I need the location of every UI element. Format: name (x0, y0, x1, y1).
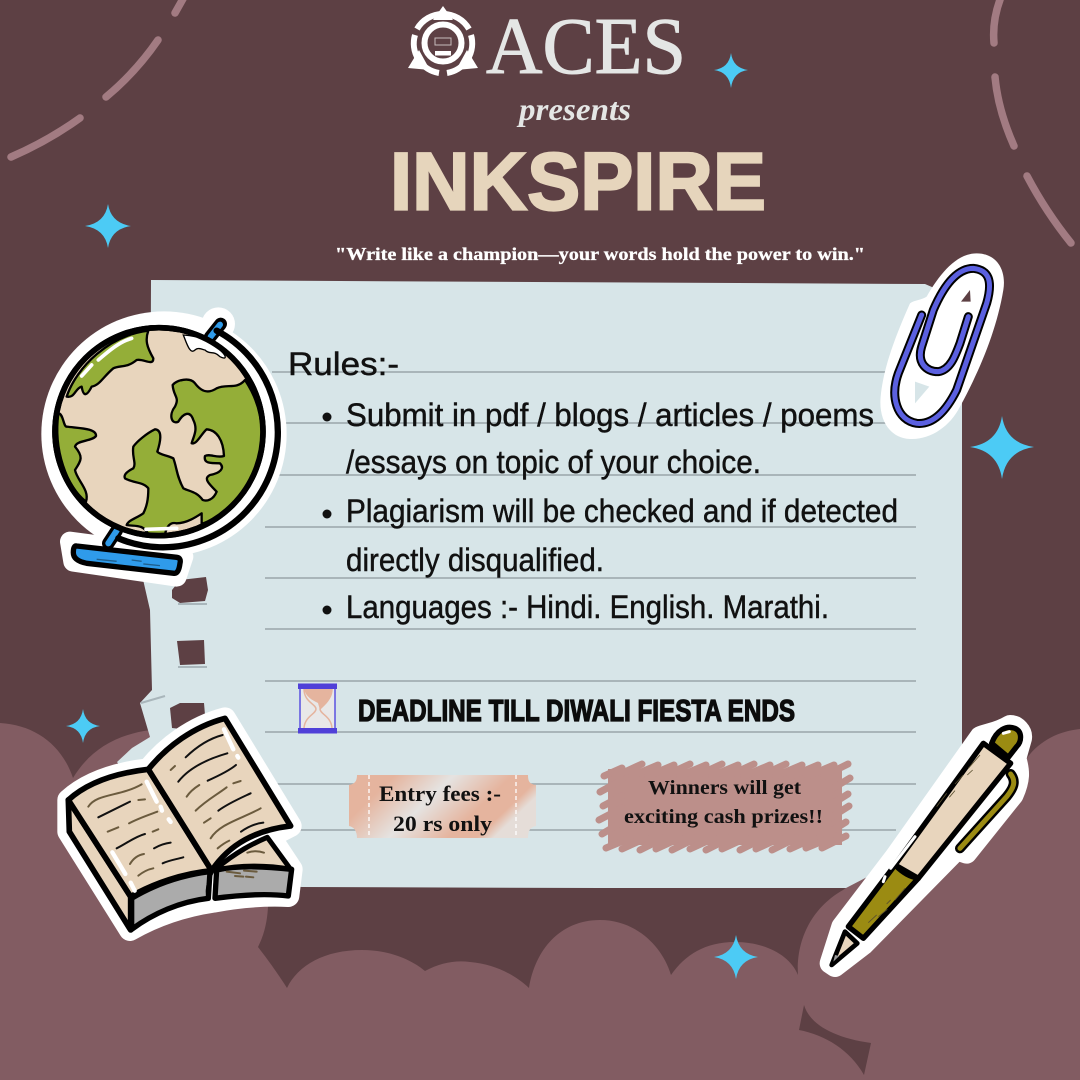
sphere (55, 328, 263, 536)
cap (992, 727, 1021, 757)
icon: pen (830, 725, 1022, 967)
background clouds (0, 723, 1080, 1080)
dashed arc top left (11, 0, 184, 157)
entry fee ticket: 20 rs only (393, 811, 492, 836)
icon: paper clip (880, 253, 1004, 439)
highlights (82, 338, 177, 529)
grip (848, 865, 918, 938)
rules list (322, 397, 898, 625)
right page (148, 718, 291, 871)
sparkle top (714, 53, 748, 88)
tip (832, 932, 857, 965)
snow cap (183, 335, 225, 358)
rule 2 (322, 493, 898, 578)
paper sheet (117, 280, 962, 888)
tagline: "Write like a champion—your words hold the power to win." (335, 244, 865, 264)
rule 2: directly disqualified. (346, 542, 604, 578)
ruled lines (265, 372, 916, 830)
sparkle left lower (66, 709, 100, 743)
sparkle right (970, 416, 1034, 479)
torn binder holes (170, 577, 208, 730)
icon: open book (68, 718, 292, 930)
winners callout scribble (599, 764, 850, 850)
spine (207, 871, 217, 900)
title: INKSPIRE (390, 136, 766, 228)
rule 1 (322, 397, 874, 480)
logo emblem (408, 6, 478, 73)
presents: presents (516, 91, 631, 127)
rule 3: Languages :- Hindi. English. Marathi. (346, 589, 829, 625)
book edge (68, 800, 131, 930)
book sticker outline (68, 718, 292, 930)
pen sticker outline (830, 725, 1022, 967)
icon: globe (41, 307, 287, 577)
icon: hourglass (298, 684, 337, 734)
entry fee ticket (349, 775, 536, 838)
rule 1: Submit in pdf / blogs / articles / poems (346, 397, 874, 433)
highlights (112, 729, 238, 891)
deadline text: DEADLINE TILL DIWALI FIESTA ENDS (358, 693, 795, 728)
globe sticker outline (41, 307, 287, 577)
rule 1: /essays on topic of your choice. (346, 444, 761, 480)
sparkle bottom (714, 935, 758, 979)
logo: ACES (408, 3, 686, 91)
barrel (895, 743, 1011, 878)
continents (57, 331, 262, 534)
left page (68, 769, 212, 897)
entry fee ticket: Entry fees :- (379, 781, 501, 806)
grey page blocks (132, 872, 210, 929)
page writing (88, 735, 264, 877)
dashed arc top right (994, 0, 1071, 243)
rules heading: Rules:- (288, 346, 399, 382)
rule 2: Plagiarism will be checked and if detected (346, 493, 898, 529)
ACES wordmark: ACES (486, 3, 686, 91)
stand (108, 324, 221, 543)
sparkle left upper (85, 204, 131, 248)
winners callout scribble: Winners will get (648, 777, 801, 799)
highlights (883, 732, 1009, 882)
winners callout scribble: exciting cash prizes!! (624, 806, 823, 828)
back page (217, 837, 291, 870)
clip (960, 774, 1014, 848)
